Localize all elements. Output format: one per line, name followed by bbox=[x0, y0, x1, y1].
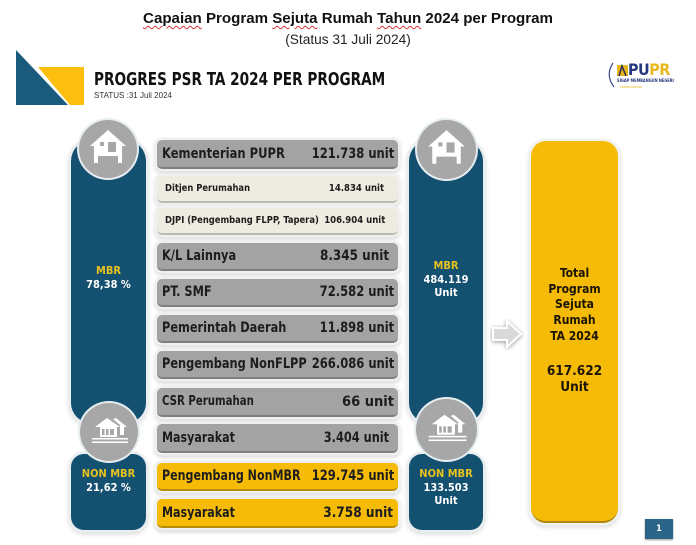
row: CSR Perumahan: 66 unit bbox=[342, 394, 394, 410]
panel: total: TA 2024 bbox=[550, 329, 599, 343]
row: Pemerintah Daerah bbox=[157, 315, 398, 343]
row: K/L Lainnya: 8.345 unit bbox=[320, 248, 389, 264]
panel: right MBR column: 484.119 bbox=[423, 272, 469, 286]
title: Capaian Program Sejuta Rumah Tahun 2024 per Program bbox=[143, 10, 553, 27]
panel: total: Rumah bbox=[553, 313, 596, 327]
panel: total: 617.622 bbox=[547, 363, 602, 379]
icon: left house bbox=[79, 120, 137, 178]
panel: total: Sejuta bbox=[555, 297, 594, 311]
row: Masyarakat MBR: Masyarakat bbox=[162, 430, 235, 446]
row: Kementerian PUPR: Kementerian PUPR bbox=[162, 146, 285, 162]
row: CSR Perumahan: CSR Perumahan bbox=[162, 394, 254, 408]
row: Ditjen Perumahan: Ditjen Perumahan bbox=[165, 182, 250, 194]
row: Masyarakat Non MBR bbox=[157, 499, 398, 528]
row: DJPI: 106.904 unit bbox=[324, 214, 385, 226]
row: Masyarakat Non MBR: Masyarakat bbox=[162, 504, 235, 520]
panel: right MBR column: MBR bbox=[433, 259, 458, 272]
header corner graphic bbox=[16, 50, 84, 105]
panel: total bbox=[531, 141, 618, 523]
panel: left NON MBR column: 21,62 % bbox=[86, 480, 131, 494]
row: Pengembang NonFLPP: Pengembang NonFLPP bbox=[162, 356, 307, 372]
panel: right MBR column bbox=[409, 140, 483, 423]
row: Masyarakat Non MBR: 3.758 unit bbox=[323, 504, 393, 520]
panel: right NON MBR column: Unit bbox=[434, 494, 458, 507]
panel: total: Total bbox=[560, 266, 589, 280]
panel: left MBR column: MBR bbox=[96, 264, 121, 277]
panel: left NON MBR column: NON MBR bbox=[82, 467, 135, 480]
row: Ditjen Perumahan: 14.834 unit bbox=[329, 182, 384, 194]
section heading: PROGRES PSR TA 2024 PER PROGRAM bbox=[94, 70, 385, 90]
panel: right NON MBR column: NON MBR bbox=[419, 467, 473, 480]
row: PT. SMF bbox=[157, 279, 398, 307]
arrow bbox=[490, 319, 524, 350]
row: DJPI: DJPI (Pengembang FLPP, Tapera) bbox=[165, 214, 319, 226]
row: Pemerintah Daerah: 11.898 unit bbox=[320, 320, 394, 336]
row: Kementerian PUPR: 121.738 unit bbox=[311, 146, 394, 162]
row: Pengembang NonMBR: Pengembang NonMBR bbox=[162, 468, 300, 484]
row: Pengembang NonFLPP bbox=[157, 351, 398, 379]
row: Masyarakat MBR: 3.404 unit bbox=[324, 430, 389, 446]
panel: total: Program bbox=[548, 282, 601, 296]
icon: right house bbox=[417, 120, 476, 179]
panel: right NON MBR column: 133.503 bbox=[423, 480, 469, 494]
row: PT. SMF: PT. SMF bbox=[162, 284, 212, 300]
row: CSR Perumahan bbox=[157, 388, 398, 417]
row: Pengembang NonFLPP: 266.086 unit bbox=[311, 356, 394, 372]
row: DJPI bbox=[157, 208, 398, 235]
row: PT. SMF: 72.582 unit bbox=[320, 284, 394, 300]
row: Masyarakat MBR bbox=[157, 424, 398, 453]
row: K/L Lainnya bbox=[157, 243, 398, 271]
row: Pengembang NonMBR bbox=[157, 463, 398, 491]
icon: left houses bbox=[80, 403, 138, 461]
row: Pemerintah Daerah: Pemerintah Daerah bbox=[162, 320, 286, 336]
status label: STATUS :31 Juli 2024 bbox=[94, 91, 172, 100]
panel: left NON MBR column bbox=[71, 454, 146, 530]
logo: PUPR: SIGAP MEMBANGUN NEGERI bbox=[617, 78, 674, 83]
logo: PUPR bbox=[608, 60, 674, 88]
logo: PUPR: PUPR bbox=[628, 60, 670, 79]
page number bbox=[645, 519, 673, 539]
panel: right NON MBR column bbox=[409, 454, 483, 530]
panel: left MBR column: 78,38 % bbox=[86, 278, 131, 290]
panel: total: Unit bbox=[560, 379, 589, 395]
row: Ditjen Perumahan bbox=[157, 176, 398, 203]
panel: right MBR column: Unit bbox=[434, 286, 458, 299]
subtitle: status date: (Status 31 Juli 2024) bbox=[285, 32, 411, 47]
row: Kementerian PUPR bbox=[157, 140, 398, 169]
row: Pengembang NonMBR: 129.745 unit bbox=[311, 468, 394, 484]
panel: left MBR column bbox=[71, 140, 146, 423]
page number: 1 bbox=[656, 524, 662, 534]
row: K/L Lainnya: K/L Lainnya bbox=[162, 248, 236, 264]
icon: right houses bbox=[416, 399, 477, 460]
